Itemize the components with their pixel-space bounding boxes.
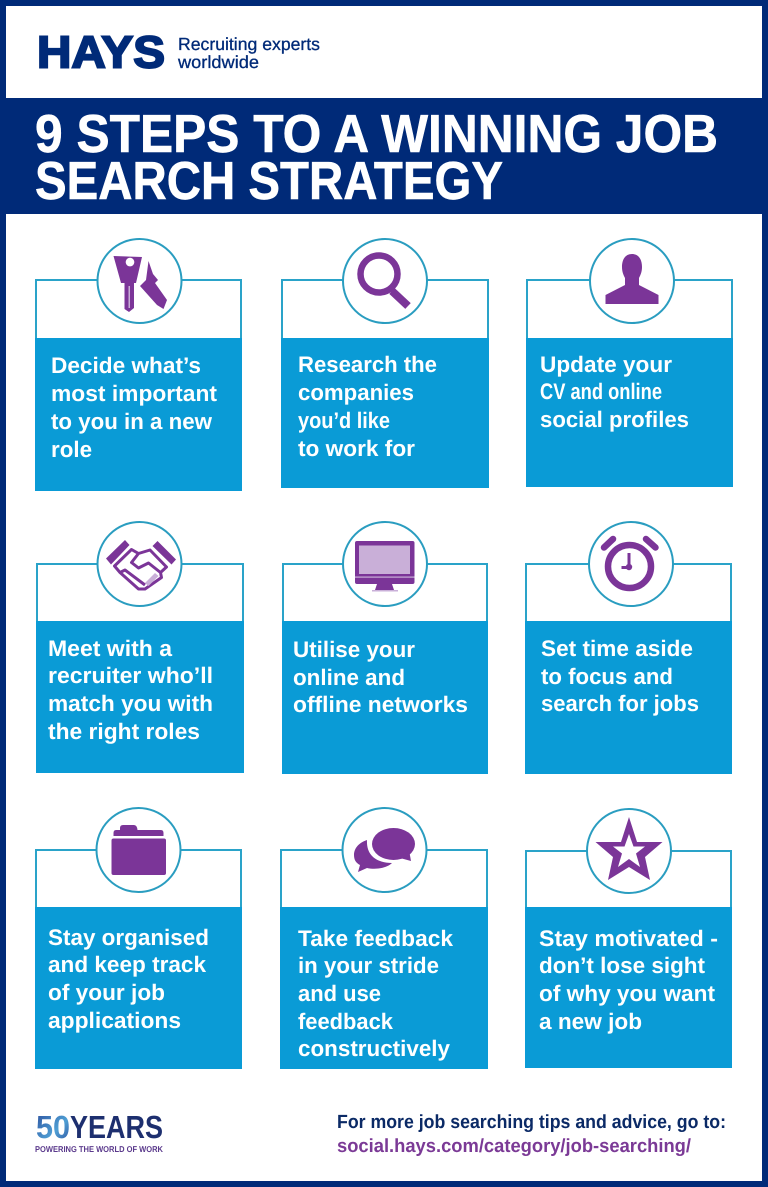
step 5 text: offline networks [293, 692, 468, 717]
step 5 text [293, 637, 468, 717]
step 3 text: social profiles [540, 407, 689, 432]
logo strapline: worldwide [177, 52, 259, 72]
title [35, 105, 718, 211]
step 7 text: and keep track [48, 952, 206, 977]
step 5 text: online and [293, 665, 405, 690]
step 6 text [541, 636, 699, 716]
call to action line: For more job searching tips and advice, go to: [337, 1112, 726, 1133]
panel: step 3 [526, 239, 733, 487]
step 8 text: Take feedback [298, 926, 453, 951]
title: 9 STEPS TO A WINNING JOB [35, 105, 718, 164]
step 7 blue box [35, 907, 242, 1069]
step 3 text: Update your [540, 352, 672, 377]
icon: star [596, 817, 662, 880]
logo wordmark: HAYS [37, 26, 165, 78]
icon: keys [114, 256, 167, 312]
panel: step 4 [36, 522, 244, 773]
icon: monitor [355, 541, 414, 592]
step 9 text: Stay motivated - [539, 926, 718, 951]
icon: alarm clock [604, 539, 656, 588]
step 3 blue box [526, 338, 733, 487]
step 9 text: don’t lose sight [539, 953, 706, 978]
step 6 icon circle [589, 522, 673, 606]
step 6 text: Set time aside [541, 636, 693, 661]
banner background [0, 98, 768, 214]
step 2 text: to work for [298, 436, 415, 461]
step 5 icon circle [343, 522, 427, 606]
step 8 text [298, 926, 453, 1061]
panel: step 5 [282, 522, 488, 774]
logo word: YEARS [70, 1109, 163, 1145]
icon: folder [112, 825, 166, 875]
step 6 text: to focus and [541, 664, 673, 689]
step 8 blue box [280, 907, 488, 1069]
step 6 text: search for jobs [541, 691, 699, 716]
icon: speech bubbles [354, 828, 415, 872]
logo strapline [177, 34, 320, 72]
step 4 text: recruiter who’ll [48, 663, 213, 688]
step 8 icon circle [342, 808, 426, 892]
step 2 text: Research the [298, 352, 437, 377]
step 4 text [48, 636, 213, 744]
step 1 text: Decide what’s [51, 353, 201, 378]
step 9 text [539, 926, 718, 1034]
step 8 text: feedback [298, 1009, 393, 1034]
step 2 blue box [281, 338, 489, 488]
step 5 blue box [282, 621, 488, 774]
step 9 text: of why you want [539, 981, 715, 1006]
link text: social.hays.com/category/job-searching/ [337, 1136, 692, 1157]
call to action [337, 1112, 726, 1157]
step 6 blue box [525, 621, 732, 774]
logo numerals: 50 [36, 1109, 70, 1145]
panel: step 6 [525, 522, 732, 774]
step 2 text: you’d like [298, 408, 390, 433]
icon: handshake [106, 540, 176, 589]
step 8 text: constructively [298, 1036, 450, 1061]
step 1 blue box [35, 338, 242, 491]
step 9 icon circle [587, 809, 671, 893]
step 2 text: companies [298, 380, 414, 405]
title banner [0, 98, 768, 214]
panel: step 8 [280, 808, 488, 1069]
step 4 text: Meet with a [48, 636, 172, 661]
logo strapline: Recruiting experts [178, 34, 320, 54]
logo tagline: POWERING THE WORLD OF WORK [35, 1144, 164, 1154]
step 3 icon circle [590, 239, 674, 323]
panel: step 9 [525, 809, 732, 1068]
logo: 50 years [35, 1109, 164, 1154]
step 8 text: in your stride [298, 953, 439, 978]
step 3 text: CV and online [540, 379, 662, 404]
step 7 text: applications [48, 1008, 181, 1033]
step 1 text: most important [51, 381, 217, 406]
icon: magnifying glass [360, 256, 408, 306]
step 4 blue box [36, 621, 244, 773]
step 4 icon circle [98, 522, 182, 606]
step 3 text [540, 352, 689, 432]
step 9 blue box [525, 907, 732, 1068]
step 7 text [48, 925, 209, 1033]
step 1 text: to you in a new [51, 409, 212, 434]
step 9 text: a new job [539, 1009, 642, 1034]
step 4 text: the right roles [48, 719, 200, 744]
icon: person [606, 254, 658, 304]
step 7 text: Stay organised [48, 925, 209, 950]
step 1 text [51, 353, 217, 462]
step 2 icon circle [343, 239, 427, 323]
panel: step 2 [281, 239, 489, 488]
step 5 text: Utilise your [293, 637, 415, 662]
step 1 icon circle [98, 239, 182, 323]
step 7 text: of your job [48, 980, 165, 1005]
panel: step 7 [35, 808, 242, 1069]
title: SEARCH STRATEGY [35, 152, 503, 211]
panel: step 1 [35, 239, 242, 491]
step 4 text: match you with [48, 691, 213, 716]
logo: Hays [37, 26, 320, 78]
step 7 icon circle [96, 808, 180, 892]
step 1 text: role [51, 437, 92, 462]
step 8 text: and use [298, 981, 381, 1006]
step 2 text [298, 352, 437, 461]
